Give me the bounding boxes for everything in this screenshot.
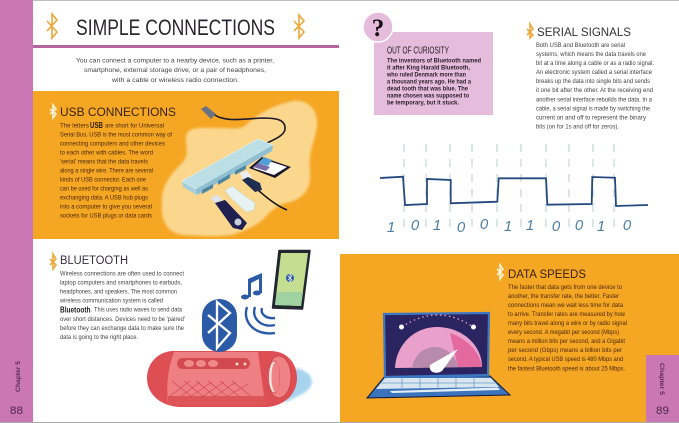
USB body text: connecting computers and other devices (60, 140, 166, 148)
intro text: You can connect a computer to a nearby device, such as a printer, (76, 58, 274, 64)
binary digits: 1 (504, 218, 512, 235)
laptop base (367, 376, 510, 398)
icon: bluetooth data speeds (497, 265, 503, 279)
serial signals body text: bits (on for 1s and off for zeros). (536, 124, 619, 130)
data speeds body text: to arrive. Transfer rates are measured by how (508, 311, 625, 318)
curiosity body text: be temporary, but it stuck. (387, 100, 459, 106)
icon: smartphone (272, 250, 310, 309)
binary digits: 1 (387, 219, 395, 236)
Bluetooth body text: Wireless connections are often used to connect (60, 271, 184, 278)
serial signals body text: cable, a serial signal is made by switching the (536, 105, 650, 112)
square wave (380, 177, 648, 206)
binary digits: 0 (552, 218, 561, 235)
illustration: laptop (367, 313, 510, 398)
Bluetooth body text: headphones, and speakers. The most common (60, 289, 177, 296)
Bluetooth body text: before they can exchange data to make sure the (60, 325, 184, 332)
curiosity body text: dead tooth that was blue. The (387, 86, 469, 92)
binary digits: 1 (433, 217, 441, 234)
data speeds body text: the fastest Bluetooth speed is about 25 Mbps. (508, 365, 625, 372)
panel: Bluetooth (50, 250, 312, 407)
heading: out of curiosity: OUT OF CURIOSITY (387, 46, 449, 56)
data speeds body text (508, 284, 627, 372)
USB body text: along a single wire. There are several (60, 168, 153, 174)
illustration: USB hub (182, 106, 291, 230)
panel: left sidebar (0, 0, 33, 422)
intro text (76, 58, 274, 84)
serial signals body text: current on and off to represent the binary (536, 114, 647, 122)
dark USB stick (210, 195, 247, 230)
heading: serial signals: SERIAL SIGNALS (537, 27, 631, 39)
intro text: smartphone, external storage drive, or a pair of headphones, (84, 67, 266, 74)
chart: binary signal (380, 144, 648, 236)
USB body text: to each other with cables. The word (60, 150, 153, 156)
white USB stick (225, 186, 255, 212)
binary digits: 0 (623, 217, 632, 234)
speed gauge (395, 315, 482, 373)
Bluetooth body text: Bluetooth (60, 306, 91, 314)
binary digits: 0 (457, 219, 466, 236)
serial signals body text: An electronic system called a serial interface (536, 69, 652, 76)
panel: data speeds (340, 254, 679, 422)
data speeds body text: second. A typical USB speed is 480 Mbps and (508, 356, 623, 363)
curiosity body text: name chosen was supposed to (387, 94, 469, 100)
heading: Bluetooth: BLUETOOTH (60, 255, 128, 267)
gauge dots (402, 315, 473, 327)
USB body text: The letters (60, 122, 90, 130)
heading: USB connections: USB CONNECTIONS (60, 107, 176, 119)
USB body text: exchanging data. A USB hub plugs (60, 194, 149, 202)
curiosity body text: it after King Harald Bluetooth, (387, 66, 470, 72)
data speeds body text: another, the transfer rate, the better. Faster (508, 293, 620, 300)
illustration: red speaker (147, 351, 297, 407)
data speeds body text: per second (Gbps) means a billion bits per (508, 347, 623, 354)
icon: bluetooth right of title (294, 15, 304, 38)
panel: USB connections (33, 91, 339, 239)
serial signals body text: systems, which means the data travels one (536, 51, 646, 58)
icon: radio waves (246, 307, 275, 333)
heading: data speeds: DATA SPEEDS (508, 269, 586, 281)
icon: bluetooth USB heading (50, 105, 56, 118)
chapter label right: Chapter 5 (658, 363, 665, 395)
icon: bluetooth serial signals (527, 24, 533, 38)
Bluetooth body text: wireless communication system is called (59, 298, 163, 305)
serial signals body text: bit at a time along a cable or as a radio signal. (536, 60, 654, 67)
USB body text: USB (90, 121, 103, 130)
hub sockets (202, 165, 246, 194)
data speeds body text: means a million bits per second, and a Gigabit (508, 338, 625, 345)
gauge needle (430, 349, 458, 373)
hub body (182, 139, 273, 195)
page tab right (646, 355, 679, 422)
page number 89: 89 (656, 405, 669, 417)
serial signals body text: Both USB and Bluetooth are serial (536, 42, 625, 49)
data card (249, 157, 291, 178)
keyboard (376, 378, 499, 389)
data speeds body text: every second. A megabit per second (Mbps) (508, 329, 619, 336)
chapter label left: Chapter 5 (15, 361, 22, 392)
USB body text: 'serial' means that the data travels (60, 158, 149, 166)
icon: music note (241, 273, 262, 300)
binary digits: 0 (480, 216, 489, 233)
binary digits (387, 216, 632, 236)
data speeds body text: connections mean we wait less time for data (508, 302, 623, 309)
illustration background blob (162, 101, 317, 236)
binary digits: 1 (597, 218, 605, 235)
data speeds body text: many bits travel along a wire or by radio signal (508, 320, 627, 327)
Bluetooth body text: laptop computers and smartphones to earbuds, (60, 280, 182, 287)
Bluetooth body text: over short distances. Devices need to be 'paired' (60, 316, 185, 323)
page number 88: 88 (10, 405, 23, 417)
title band (33, 14, 339, 48)
dark plug with cable (240, 171, 287, 210)
curiosity body text: who ruled Denmark more than (386, 72, 466, 78)
cable with plug (201, 106, 285, 143)
title: SIMPLE CONNECTIONS (76, 15, 275, 40)
panel: serial signals (527, 24, 654, 130)
USB body text (60, 121, 172, 220)
USB body text: are short for Universal (105, 122, 165, 130)
serial signals body text: another serial interface rebuilds the data. In a (536, 96, 652, 103)
data speeds body text: The faster that data gets from one device to (508, 284, 622, 291)
curiosity body text (386, 59, 481, 106)
USB body text: into a computer to give you several (60, 204, 152, 210)
USB body text: kinds of USB connector. Each one (60, 176, 146, 184)
icon: bluetooth heading (50, 254, 56, 269)
timing guide lines (404, 144, 614, 233)
Bluetooth body text: . This uses radio waves to send data (91, 307, 182, 314)
icon: question mark: ? (372, 15, 384, 42)
USB body text: sockets for USB plugs or data cards (60, 212, 153, 220)
Bluetooth body text (59, 271, 185, 341)
binary digits: 0 (575, 217, 584, 234)
curiosity body text: The inventors of Bluetooth named (387, 59, 481, 65)
serial signals body text: it one bit after the other. At the receiving end (536, 87, 653, 94)
icon: bluetooth badge (202, 299, 237, 352)
binary digits: 1 (526, 217, 534, 234)
serial signals body text: breaks up the data into single bits and sends (536, 78, 651, 85)
binary digits: 0 (411, 217, 420, 234)
USB body text: Serial Bus. USB is the most common way of (60, 132, 172, 138)
icon: bluetooth left of title (47, 14, 57, 38)
intro text: with a cable or wireless radio connection. (111, 77, 239, 84)
laptop screen (384, 313, 489, 377)
panel: out of curiosity (363, 12, 493, 115)
USB body text: can be used for charging as well as (60, 186, 149, 192)
serial signals body text (536, 42, 654, 130)
curiosity body text: a thousand years ago. He had a (387, 80, 472, 86)
illustration: speaker splash (284, 368, 312, 403)
Bluetooth body text: data is going to the right place. (60, 334, 138, 341)
